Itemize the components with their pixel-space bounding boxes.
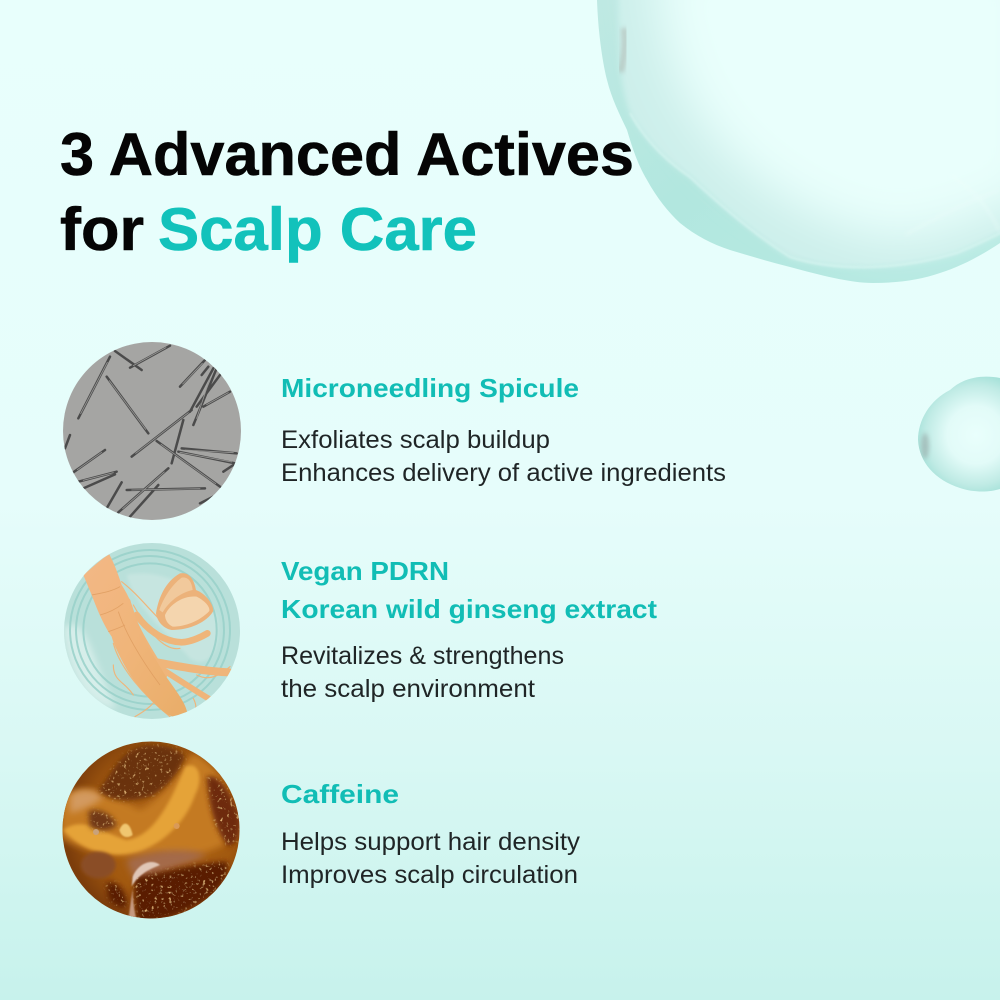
dark mottled areas [98,745,185,800]
sliced ginseng pieces [156,573,213,630]
root branches [113,582,230,717]
ingredient text: vegan PDRN [281,556,657,703]
title: Scalp Care [158,196,477,263]
ingredient text: vegan PDRN: Vegan PDRN [281,556,449,586]
ingredient text: caffeine: Improves scalp circulation [281,861,578,889]
ingredient text: vegan PDRN: Korean wild ginseng extract [281,594,657,624]
milky highlights [132,862,160,887]
title [60,121,634,263]
soft tones [60,753,240,856]
ingredient image: microneedling spicules [60,340,245,525]
main root [83,554,187,717]
ingredient text: caffeine [281,779,581,889]
ingredient text: microneedling spicule: Microneedling Spicule [281,373,579,403]
ingredient image: ginseng root in petri dish [60,540,245,725]
ingredient text: caffeine: Helps support hair density [281,828,581,856]
ingredient text: vegan PDRN: Revitalizes & strengthens [281,642,564,670]
small water bubble [918,376,1000,492]
title: for [60,196,144,263]
ingredient image: caffeine swirl [60,740,245,925]
large water bubble [590,0,1000,290]
ingredient text: caffeine: Caffeine [281,779,399,809]
ingredient text: vegan PDRN: the scalp environment [281,675,535,703]
title: 3 Advanced Actives [60,121,634,188]
ingredient text: microneedling spicule: Enhances delivery of active ingredients [281,459,726,487]
ingredient text: microneedling spicule [281,373,726,487]
ingredient text: microneedling spicule: Exfoliates scalp buildup [281,426,550,454]
